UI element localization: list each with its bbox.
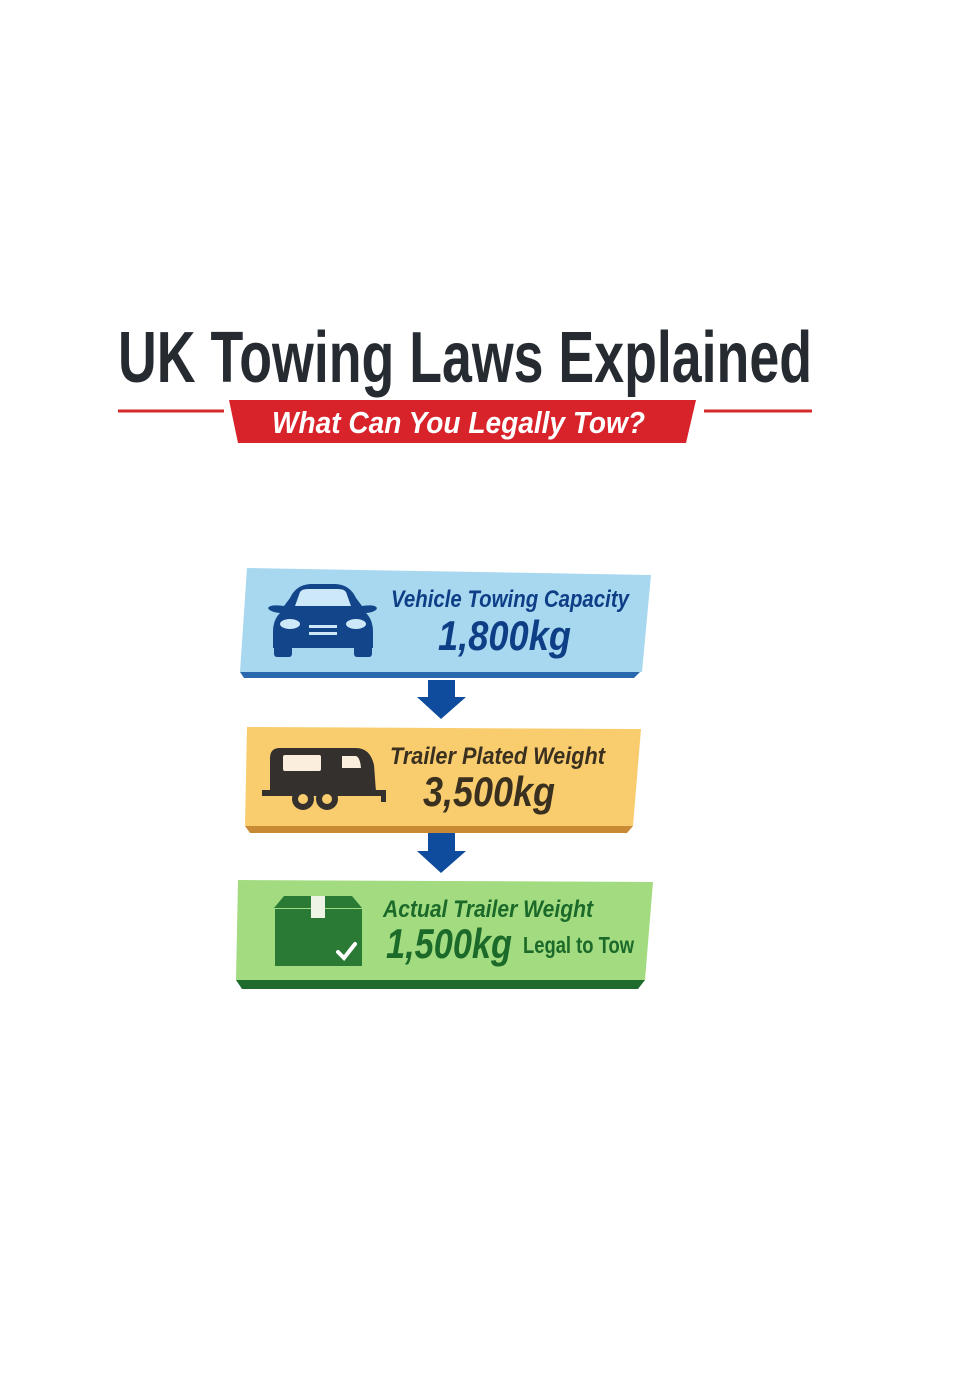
panel: actual trailer weight: Legal to Tow (523, 932, 634, 958)
panel: trailer plated weight: 3,500kg (423, 768, 555, 815)
panel: actual trailer weight: Actual Trailer Weight (382, 896, 594, 923)
panel: actual trailer weight: 1,500kg (386, 920, 512, 967)
icon: car (268, 584, 377, 657)
subtitle banner: What Can You Legally Tow? (272, 405, 645, 440)
panel: vehicle towing capacity: Vehicle Towing Capacity (391, 586, 630, 613)
arrow 1 (417, 680, 466, 719)
panel: vehicle towing capacity (240, 568, 651, 678)
panel: vehicle towing capacity: 1,800kg (438, 612, 571, 659)
panel: actual trailer weight (236, 880, 653, 989)
icon: box with check (274, 896, 362, 966)
panel: trailer plated weight: Trailer Plated Weight (390, 743, 606, 770)
arrow 2 (417, 833, 466, 873)
icon: trailer (262, 748, 386, 810)
panel: trailer plated weight (245, 727, 641, 833)
